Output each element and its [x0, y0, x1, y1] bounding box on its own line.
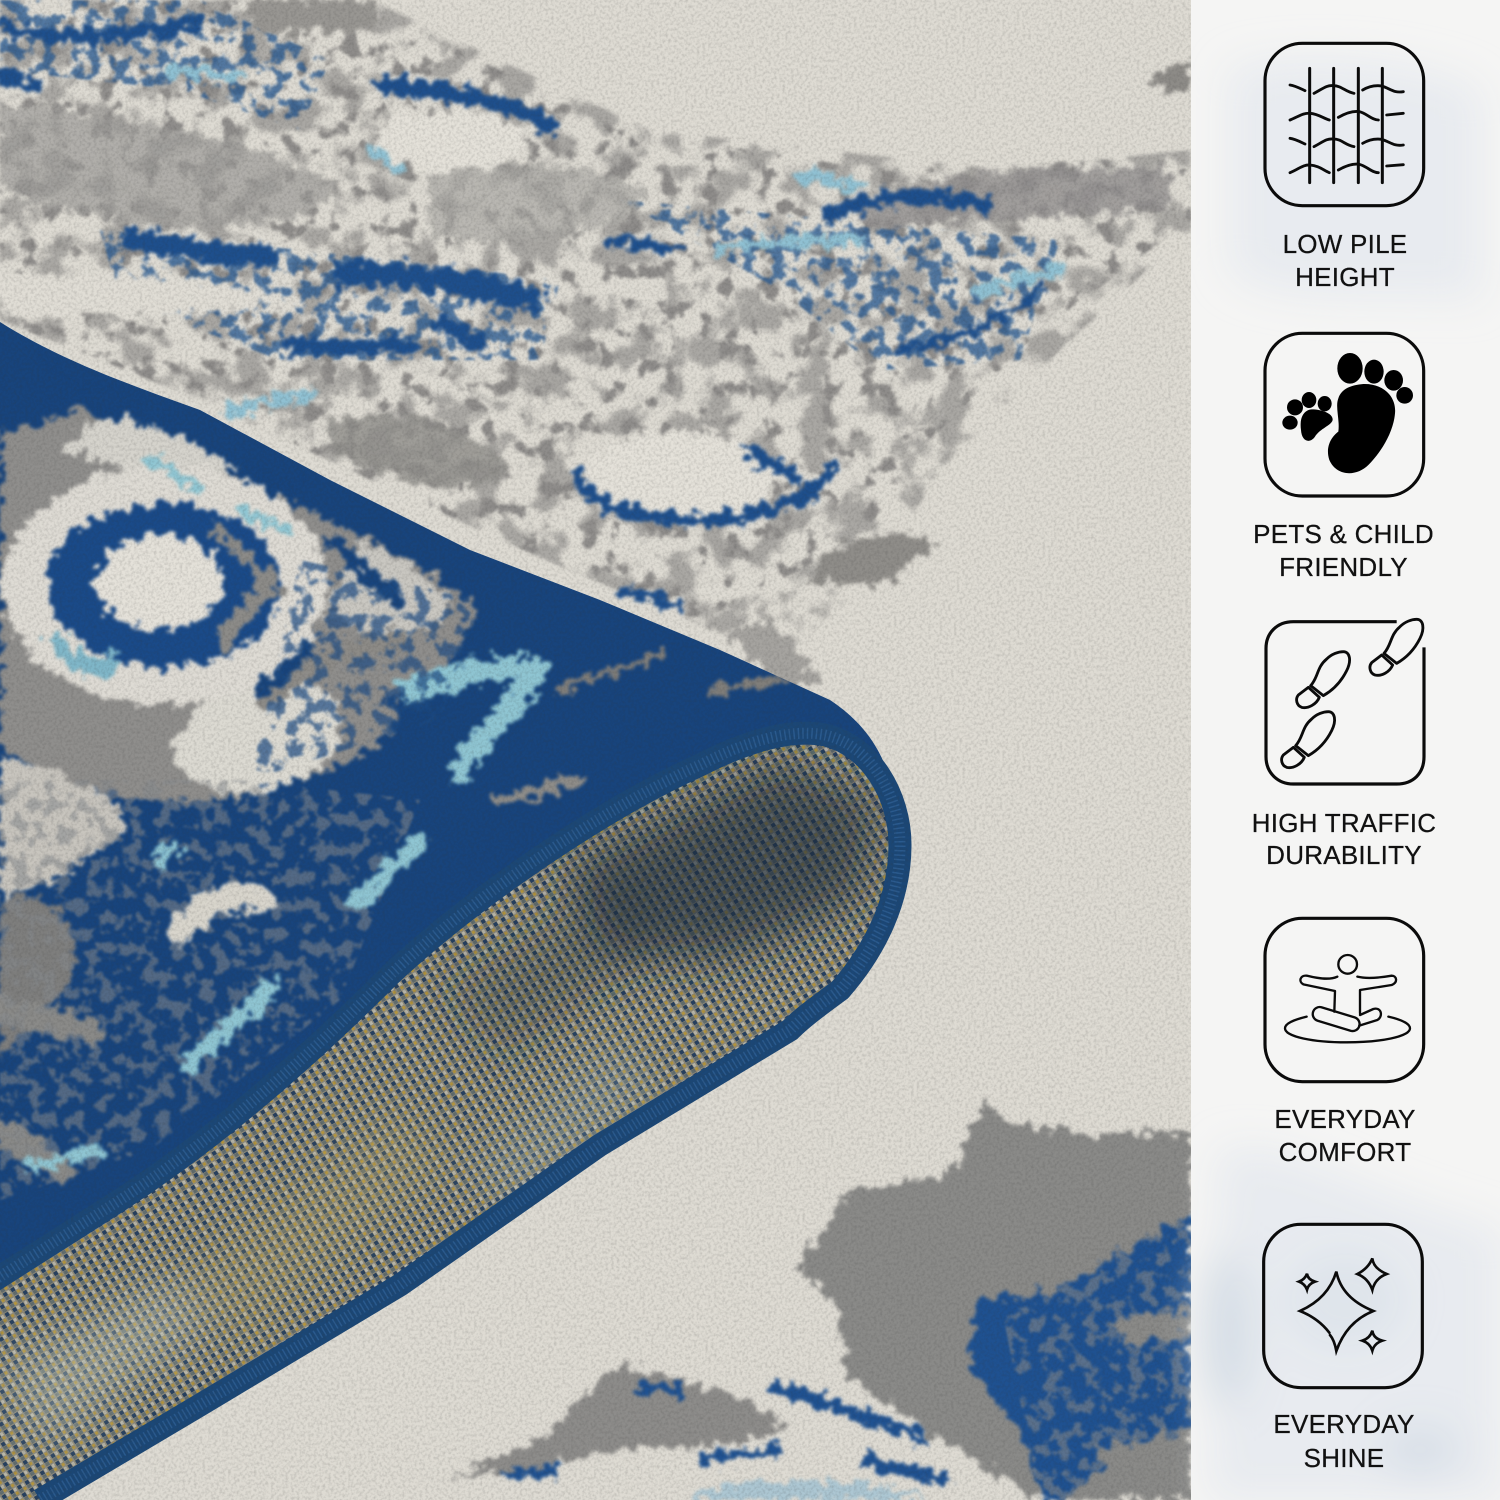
rug binding edge: [0, 733, 900, 1500]
label: low pile height: LOW PILE: [1283, 229, 1407, 259]
feature: everyday shine: [1264, 1224, 1422, 1473]
icon: paw and footprint: [1265, 333, 1424, 496]
lower-right rug pattern: [445, 1100, 1191, 1500]
feature: low pile height: [1265, 43, 1424, 292]
label: everyday comfort: COMFORT: [1279, 1137, 1411, 1167]
upper rug pattern: [0, 0, 1191, 690]
feature: everyday comfort: [1265, 918, 1424, 1167]
icon: footsteps: [1266, 619, 1424, 784]
label: high traffic durability: DURABILITY: [1266, 840, 1422, 870]
folded rug top face: [0, 322, 883, 1263]
label: everyday comfort: EVERYDAY: [1274, 1104, 1416, 1134]
feature: high traffic durability: [1252, 619, 1436, 870]
label: high traffic durability: HIGH TRAFFIC: [1252, 808, 1436, 838]
icon: meditating person: [1265, 918, 1424, 1082]
label: everyday shine: EVERYDAY: [1273, 1409, 1415, 1439]
photo: rug close-up: [0, 0, 1191, 1500]
feature: pets and child friendly: [1253, 333, 1434, 582]
icon: sparkles: [1264, 1224, 1422, 1388]
label: low pile height: HEIGHT: [1295, 262, 1395, 292]
label: everyday shine: SHINE: [1304, 1443, 1384, 1473]
icon: woven pile: [1265, 43, 1424, 206]
label: pets and child friendly: PETS & CHILD: [1253, 519, 1434, 549]
panel: feature sidebar: [1191, 0, 1500, 1500]
label: pets and child friendly: FRIENDLY: [1279, 552, 1408, 582]
backing of folded rug: [0, 744, 888, 1500]
